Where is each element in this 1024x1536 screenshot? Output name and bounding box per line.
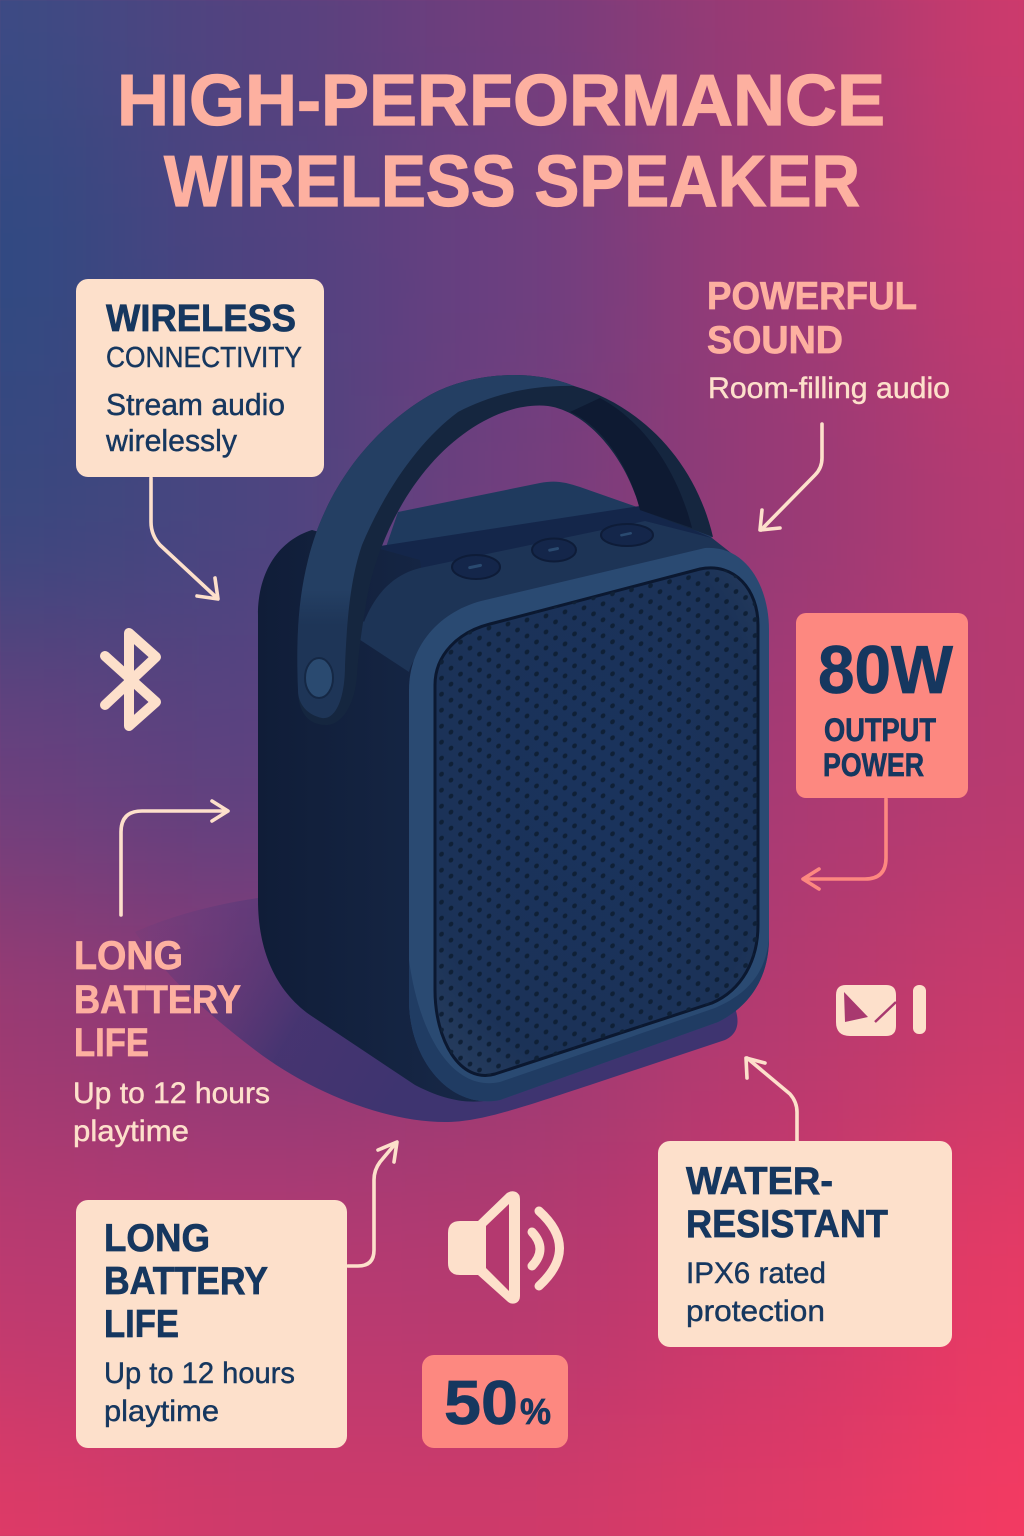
text block: long battery life — [73, 934, 270, 1148]
panel: water resistant: IPX6 rated — [686, 1257, 826, 1290]
handle lit face — [297, 375, 574, 718]
arrow: water resistant to speaker — [746, 1058, 797, 1141]
title: WIRELESS SPEAKER — [164, 142, 860, 222]
panel: long battery life card: LONG — [104, 1217, 210, 1260]
panel: 50% badge: % — [520, 1391, 551, 1432]
arrow: wireless to speaker — [151, 478, 218, 599]
speaker ground shadow — [135, 898, 738, 1122]
control buttons — [452, 524, 653, 579]
panel: wireless connectivity — [76, 279, 324, 477]
handle — [297, 375, 713, 725]
icon: speaker volume — [448, 1191, 560, 1304]
front frame — [409, 548, 769, 1101]
speaker left side body — [258, 530, 520, 1102]
panel: 80W output power: OUTPUT — [824, 712, 936, 748]
panel: wireless connectivity: Stream audio — [106, 387, 285, 422]
arrow: battery life to speaker — [121, 801, 228, 915]
panel: wireless connectivity: CONNECTIVITY — [106, 342, 302, 374]
text block: long battery life: LONG — [74, 934, 183, 978]
panel: wireless connectivity: WIRELESS — [106, 298, 296, 340]
panel: long battery life card: playtime — [104, 1395, 219, 1428]
speaker top rear face — [385, 482, 713, 600]
speaker grille — [435, 568, 758, 1075]
arrow: 80W to speaker — [803, 799, 886, 889]
panel: water resistant — [658, 1141, 952, 1347]
panel: 80W output power — [796, 613, 968, 798]
title: HIGH-PERFORMANCE — [117, 61, 885, 141]
panel: water resistant: WATER- — [686, 1160, 833, 1203]
panel: 50% badge: 50 — [444, 1369, 518, 1438]
panel: long battery life card: Up to 12 hours — [104, 1357, 295, 1390]
handle silhouette — [297, 375, 713, 725]
text block: long battery life: LIFE — [74, 1021, 149, 1065]
icon: bluetooth — [105, 633, 156, 726]
title — [117, 61, 885, 222]
frame lower lip — [409, 938, 769, 1101]
handle far inner — [570, 398, 692, 528]
panel: long battery life card — [76, 1200, 347, 1448]
panel: water resistant: RESISTANT — [686, 1203, 888, 1246]
text block: long battery life: playtime — [73, 1115, 189, 1148]
panel: long battery life card: LIFE — [104, 1303, 179, 1346]
arrow: powerful sound to speaker — [760, 424, 822, 530]
panel: 80W output power: POWER — [823, 747, 924, 783]
text block: long battery life: Up to 12 hours — [73, 1077, 270, 1110]
speaker shoulder — [345, 521, 740, 672]
panel: long battery life card: BATTERY — [104, 1260, 268, 1303]
text block: powerful sound: SOUND — [707, 319, 843, 362]
text block: powerful sound: POWERFUL — [707, 275, 917, 318]
text block: powerful sound: Room-filling audio — [708, 372, 950, 405]
panel: 50% badge — [422, 1355, 568, 1448]
panel: wireless connectivity: wirelessly — [105, 423, 237, 458]
text block: long battery life: BATTERY — [74, 978, 241, 1022]
speaker illustration — [135, 375, 769, 1122]
arrow: battery card to speaker — [348, 1142, 397, 1266]
icon: envelope and bar — [836, 985, 926, 1036]
panel: water resistant: protection — [686, 1295, 825, 1328]
panel: 80W output power: 80W — [818, 632, 954, 708]
handle pivot — [305, 658, 333, 698]
text block: powerful sound — [707, 275, 950, 405]
